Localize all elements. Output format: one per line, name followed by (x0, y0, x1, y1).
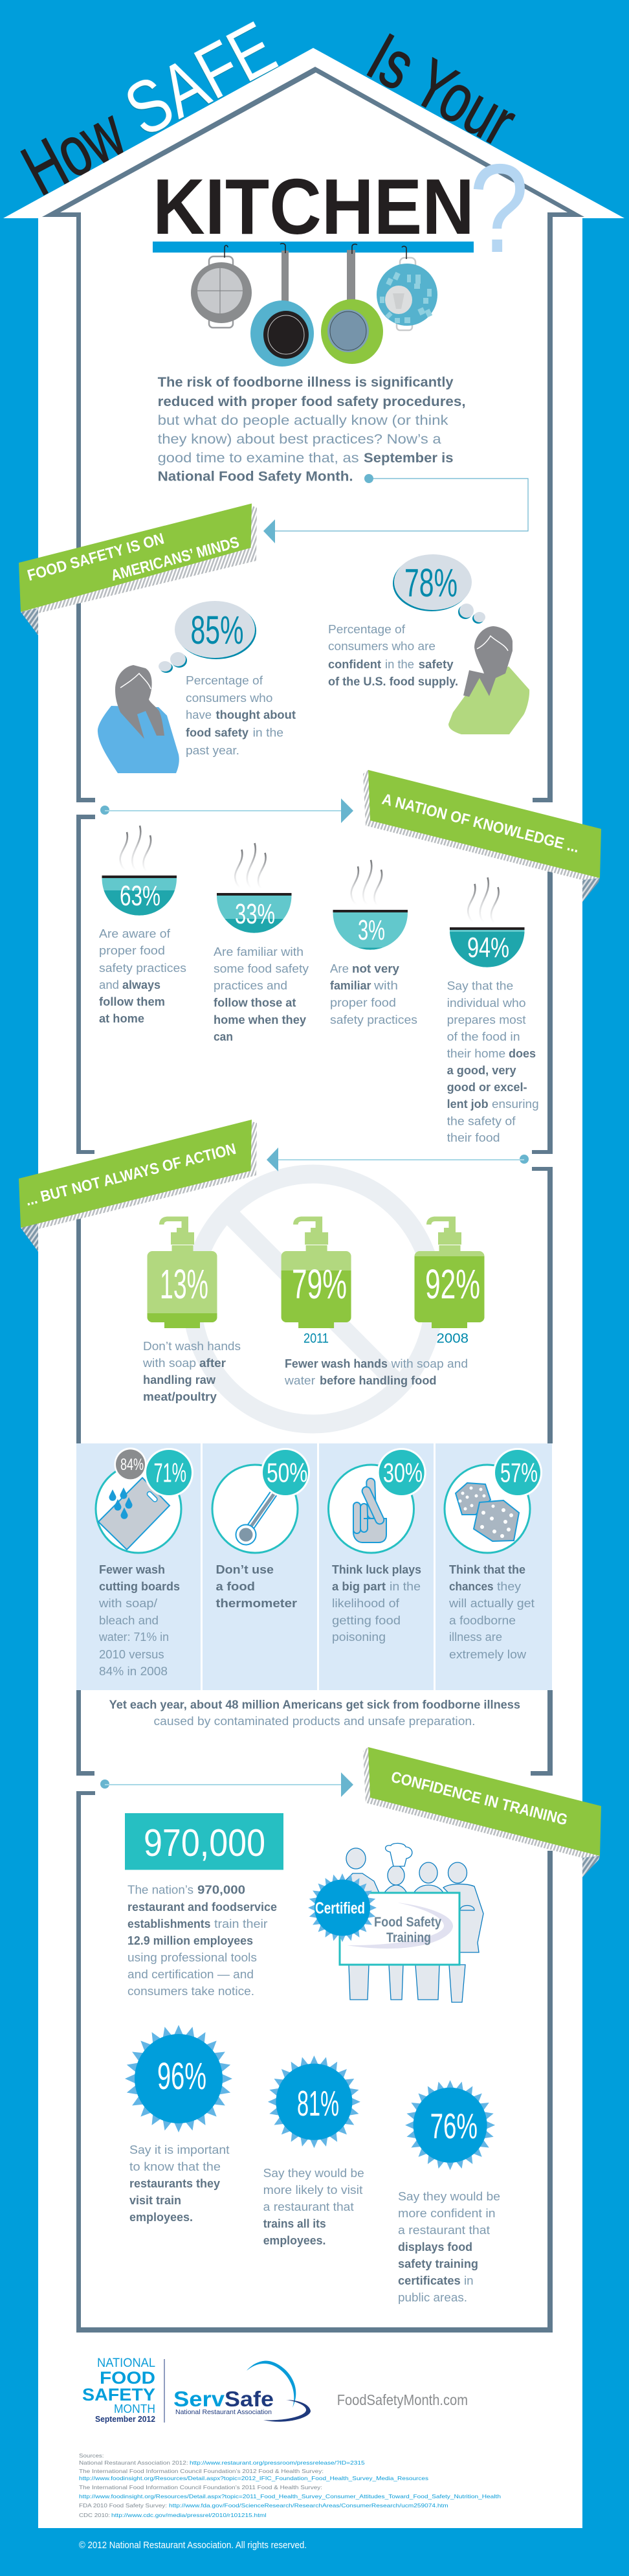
text: 94% caption: Say that the (447, 980, 513, 993)
panel: dice chances: will actually get (448, 1597, 535, 1610)
icon: hanging pots and pans (191, 243, 437, 367)
section banner: Confidence in training (363, 1747, 601, 1877)
text: 970,000 paragraph: restaurant and foodservice (127, 1901, 277, 1914)
panel: fingers crossed luck (319, 1443, 434, 1690)
section banner: Food safety is on Americans' minds: FOOD SAFETY IS ON (25, 530, 166, 585)
text: 85% caption: consumers who (186, 692, 273, 705)
text: 13% caption: meat/poultry (143, 1390, 217, 1403)
text: 63% caption: proper food (99, 944, 165, 957)
text: 94% caption (447, 980, 539, 1144)
text: 81% caption: more likely to visit (263, 2184, 362, 2197)
panel: thermometer: thermometer (216, 1597, 297, 1610)
text: 76% caption: a restaurant that (398, 2224, 490, 2237)
text: 33% caption: some food safety (214, 962, 309, 975)
text: 81% caption: employees. (263, 2234, 326, 2247)
bowl: 3% (333, 860, 408, 951)
text: 63% caption: Are aware of (99, 927, 171, 940)
logo: ServSafe: Serv (173, 2387, 225, 2411)
no symbol background (192, 1174, 434, 1424)
text: 96% caption (129, 2143, 230, 2224)
panel: dice chances: they (497, 1580, 521, 1593)
text: hand washing caption (284, 1357, 468, 1387)
panel: cutting boards: Fewer wash (99, 1563, 165, 1576)
bowl: 33% (217, 843, 291, 934)
panel: dice chances: extremely low (449, 1648, 527, 1661)
title: How SAFE Is Your (10, 6, 528, 210)
text: 48 million statement: caused by contaminated products and unsafe preparation. (154, 1715, 475, 1728)
panel: fingers crossed luck: likelihood of (332, 1597, 400, 1610)
text: 78% caption: in the (385, 658, 414, 671)
text: 76% caption: displays food (398, 2241, 472, 2254)
text: 33% caption: home when they (214, 1013, 306, 1026)
text: 94% caption: good or excel- (447, 1081, 527, 1094)
logo: National Food Safety Month: NATIONAL (97, 2356, 155, 2370)
seal: 96% (125, 2025, 232, 2132)
bowl: 63%: 63% (120, 880, 160, 912)
text: 970,000 paragraph: 12.9 million employees (127, 1934, 253, 1947)
bowl: 94% (450, 877, 524, 969)
text: 48 million statement: Yet each year, about 48 million Americans get sick from foodborne illness (109, 1699, 520, 1712)
text: 94% caption: prepares most (447, 1013, 526, 1026)
logo: ServSafe: Safe (225, 2387, 274, 2411)
text: 81% caption: a restaurant that (263, 2200, 354, 2213)
text: 3% caption: familiar (330, 979, 371, 992)
seal: 81% (268, 2055, 360, 2148)
sources list (79, 2452, 501, 2518)
panel: cutting boards: 71% (154, 1458, 186, 1488)
panel: fingers crossed luck: poisoning (332, 1631, 386, 1644)
section banner: But not always of action (19, 1120, 257, 1252)
seal: 81%: 81% (297, 2083, 339, 2123)
text: 3% caption: Are (330, 962, 349, 975)
text: 78% caption: of the U.S. food supply. (328, 675, 458, 688)
text: 78% caption: safety (419, 658, 454, 671)
text: 85% caption: Percentage of (186, 674, 263, 687)
text: 3% caption: with (373, 979, 398, 992)
section banner: Confidence in training: CONFIDENCE IN TRAINING (390, 1768, 569, 1829)
text: 94% caption: does (509, 1047, 536, 1060)
panel: cutting boards: water: 71% in (98, 1631, 169, 1644)
seal: 76%: 76% (430, 2106, 478, 2146)
section banner: A nation of knowledge (363, 770, 601, 902)
website link: FoodSafetyMonth.com (337, 2391, 468, 2408)
soap bottle: 13% (148, 1217, 217, 1328)
text: 3% caption: safety practices (330, 1013, 417, 1026)
text: 85% caption: in the (253, 727, 283, 740)
intro paragraph: but what do people actually know (or think (158, 413, 448, 428)
title word: KITCHEN: KITCHEN (153, 163, 474, 251)
section banner: A nation of knowledge: A NATION OF KNOWLEDGE ... (381, 791, 581, 857)
panel: fingers crossed luck: 30% (383, 1458, 423, 1488)
text: 970,000 paragraph: 970,000 (197, 1884, 245, 1897)
panel: thermometer: 50% (267, 1458, 308, 1488)
bowl: 94%: 94% (467, 932, 509, 964)
logo: National Food Safety Month: FOOD (100, 2368, 155, 2388)
panel: dice chances: Think that the (449, 1563, 525, 1576)
panel: thermometer: a food (216, 1580, 255, 1593)
arrow: to section 2 (100, 798, 353, 823)
arrow: to section 3 (267, 1147, 529, 1171)
intro paragraph: September is (364, 451, 453, 466)
soap bottle: 13%: 13% (160, 1261, 208, 1307)
text: hand washing caption: with soap and (390, 1357, 468, 1370)
logo: ServSafe: National Restaurant Association (175, 2408, 272, 2416)
soap bottle: 79% 2011: 2011 (303, 1331, 329, 1346)
text: 3% caption: proper food (330, 996, 396, 1009)
sources list: http://www.cdc.gov/media/pressrel/2010/r101215.html (111, 2512, 267, 2518)
logo: National Food Safety Month (82, 2356, 164, 2424)
soap bottle: 92% 2008: 2008 (436, 1331, 469, 1346)
text: hand washing caption: Fewer wash hands (285, 1357, 388, 1370)
seal: 96%: 96% (157, 2055, 206, 2097)
copyright footer: © 2012 National Restaurant Association. All rights reserved. (79, 2540, 307, 2551)
panel: thermometer: Don’t use (216, 1563, 274, 1576)
panel: dice chances: illness are (449, 1631, 502, 1644)
text: 970,000 paragraph: consumers take notice. (127, 1985, 254, 1998)
text: 85% caption: past year. (186, 744, 239, 757)
soap bottle: 92% 2008 (414, 1217, 484, 1346)
intro paragraph: The risk of foodborne illness is significantly (158, 375, 454, 390)
text: 96% caption: Say it is important (129, 2143, 230, 2156)
text: 78% caption (328, 623, 458, 688)
illustration: restaurant staff holding certificate: Training (386, 1930, 431, 1945)
sources list: The International Food Information Council Foundation’s 2012 Food & Health Survey: (79, 2468, 324, 2474)
thought bubble: 85% (159, 601, 256, 673)
intro paragraph: reduced with proper food safety procedures, (158, 394, 466, 409)
text: 85% caption: thought about (216, 708, 296, 721)
intro paragraph: good time to examine that, as (158, 451, 359, 466)
text: 76% caption: Say they would be (398, 2190, 500, 2203)
panel: cutting boards: with soap/ (98, 1597, 157, 1610)
illustration: restaurant staff holding certificate: Food Safety (374, 1915, 441, 1930)
sources list: http://www.restaurant.org/pressroom/pressrelease/?ID=2315 (190, 2459, 365, 2466)
text: 33% caption: practices and (214, 979, 287, 992)
text: 63% caption: follow them (99, 995, 165, 1008)
panel: cutting boards: 2010 versus (99, 1648, 164, 1661)
sources list: http://www.foodinsight.org/Resources/Detail.aspx?topic=2012_IFIC_Foundation_Food_Health_Survey_Media_Resources (79, 2475, 428, 2481)
bowl: 33%: 33% (235, 898, 275, 930)
text: 78% caption: confident (328, 658, 381, 671)
panel: dice chances: chances (449, 1580, 493, 1593)
arrow: to section 4 (100, 1772, 353, 1797)
panel: fingers crossed luck: in the (390, 1580, 421, 1593)
text: 94% caption: a good, very (447, 1064, 516, 1077)
icon: thinking man in green (448, 626, 529, 734)
text: 96% caption: employees. (129, 2211, 193, 2224)
text: 85% caption: food safety (186, 727, 248, 740)
text: 94% caption: lent job (447, 1098, 489, 1111)
text: 13% caption: handling raw (143, 1373, 216, 1386)
title: How SAFE Is Your: How (10, 93, 137, 210)
text: 970,000 paragraph (127, 1884, 277, 1998)
text: 81% caption (263, 2167, 364, 2247)
text: 970,000 paragraph: train their (214, 1917, 268, 1930)
text: 63% caption: always (122, 978, 160, 991)
text: 85% caption (186, 674, 296, 757)
text: 76% caption: certificates (398, 2274, 461, 2287)
text: 94% caption: their home (447, 1047, 505, 1060)
text: 76% caption: safety training (398, 2257, 478, 2270)
illustration: restaurant staff holding certificate: Certified (315, 1899, 365, 1917)
text: hand washing caption: before handling food (320, 1374, 436, 1387)
intro paragraph: National Food Safety Month. (158, 469, 353, 484)
panel: fingers crossed luck: getting food (332, 1614, 401, 1627)
text: 3% caption: not very (352, 962, 399, 975)
stat box: 970,000 (125, 1813, 283, 1870)
sources list: http://www.foodinsight.org/Resources/Detail.aspx?topic=2011_Food_Health_Survey_Consumer_Attitudes_Toward_Food_Safety_Nutrition_Health (79, 2493, 501, 2500)
text: 81% caption: Say they would be (263, 2167, 364, 2180)
text: 96% caption: visit train (129, 2194, 181, 2207)
text: 970,000 paragraph: establishments (127, 1917, 211, 1930)
intro paragraph: they know) about best practices? Now’s a (158, 432, 441, 447)
thought bubble: 78%: 78% (404, 561, 458, 605)
text: 970,000 paragraph: and certification — and (127, 1968, 254, 1981)
text: 76% caption (398, 2190, 500, 2304)
sources list: Sources: (79, 2452, 104, 2459)
text: 13% caption: with soap (142, 1357, 196, 1370)
title: How SAFE Is Your: Is Your (356, 19, 528, 161)
section banner: Food safety is on Americans' minds (19, 504, 257, 635)
text: 63% caption: at home (99, 1012, 144, 1025)
text: 33% caption: follow those at (214, 997, 296, 1010)
text: 76% caption: public areas. (398, 2291, 467, 2304)
icon: thinking woman in blue (98, 665, 179, 773)
sources list: CDC 2010: (79, 2512, 110, 2518)
panel: dice chances: a foodborne (449, 1614, 516, 1627)
sources list: The International Food Information Council Foundation’s 2011 Food & Health Survey: (79, 2484, 322, 2491)
pot rack bar (153, 242, 474, 253)
text: 33% caption (214, 945, 309, 1043)
panel: cutting boards: cutting boards (99, 1580, 180, 1593)
text: 94% caption: of the food in (447, 1030, 520, 1043)
seal: 76% (405, 2080, 495, 2170)
text: 63% caption: safety practices (99, 962, 186, 975)
panel: cutting boards: 84% in 2008 (99, 1665, 168, 1678)
logo: National Food Safety Month: September 2012 (95, 2415, 155, 2424)
stat box: 970,000: 970,000 (144, 1822, 265, 1864)
house: grey frame outline (42, 67, 584, 2333)
text: 3% caption (330, 962, 417, 1026)
text: 78% caption: consumers who are (328, 640, 436, 653)
text: 78% caption: Percentage of (328, 623, 406, 636)
panel: fingers crossed luck: a big part (332, 1580, 386, 1593)
soap bottle: 79% 2011 (281, 1217, 351, 1346)
section banner: Food safety is on Americans' minds: AMERICANS’ MINDS (109, 534, 241, 585)
text: 63% caption: and (99, 978, 119, 991)
text: 81% caption: trains all its (263, 2217, 326, 2230)
text: 96% caption: restaurants they (129, 2177, 220, 2190)
sources list: FDA 2010 Food Safety Survey: (79, 2502, 167, 2509)
intro paragraph (158, 375, 466, 484)
text: 970,000 paragraph: using professional tools (127, 1951, 257, 1964)
text: 63% caption (99, 927, 186, 1025)
panel: dice chances (436, 1443, 552, 1690)
text: hand washing caption: water (284, 1374, 315, 1387)
thought bubble: 78% (393, 554, 485, 624)
sources list: National Restaurant Association 2012: (79, 2459, 188, 2466)
section banner: But not always of action: ... BUT NOT ALWAYS OF ACTION (24, 1140, 238, 1210)
panel: fingers crossed luck: Think luck plays (332, 1563, 421, 1576)
text: 94% caption: ensuring (492, 1098, 539, 1111)
text: 13% caption: Don’t wash hands (143, 1340, 241, 1353)
text: 33% caption: can (214, 1030, 233, 1043)
logo: National Food Safety Month: MONTH (114, 2402, 155, 2415)
panel: dice chances: 57% (500, 1458, 538, 1488)
text: 76% caption: more confident in (398, 2207, 496, 2220)
panel: thermometer (203, 1443, 317, 1690)
text: 48 million statement (109, 1699, 520, 1728)
bowl: 3%: 3% (358, 914, 385, 946)
soap bottle: 79% 2011: 79% (292, 1261, 347, 1307)
panel: cutting boards: 84% (120, 1456, 144, 1474)
logo: ServSafe (173, 2361, 311, 2422)
arrow: intro to section 1 (263, 474, 528, 543)
panel: cutting boards: bleach and (99, 1614, 159, 1627)
text: 76% caption: in (464, 2274, 474, 2287)
sources list: http://www.fda.gov/Food/ScienceResearch/ResearchAreas/ConsumerResearch/ucm259074.htm (169, 2502, 448, 2509)
logo: National Food Safety Month: SAFETY (82, 2385, 155, 2404)
text: 96% caption: to know that the (129, 2160, 221, 2173)
text: 94% caption: their food (447, 1131, 500, 1144)
question mark: ? (469, 138, 529, 279)
text: 13% caption: after (199, 1357, 226, 1370)
soap bottle: 92% 2008: 92% (425, 1261, 480, 1307)
thought bubble: 85%: 85% (190, 608, 243, 652)
text: 33% caption: Are familiar with (214, 945, 303, 958)
panel: cutting boards (76, 1443, 201, 1690)
text: 970,000 paragraph: The nation’s (127, 1884, 193, 1897)
illustration: restaurant staff holding certificate (308, 1843, 483, 2002)
text: 94% caption: the safety of (447, 1115, 516, 1128)
text: 94% caption: individual who (447, 997, 526, 1010)
bowl: 63% (102, 826, 177, 917)
text: 13% caption (142, 1340, 241, 1403)
text: 85% caption: have (186, 708, 212, 721)
